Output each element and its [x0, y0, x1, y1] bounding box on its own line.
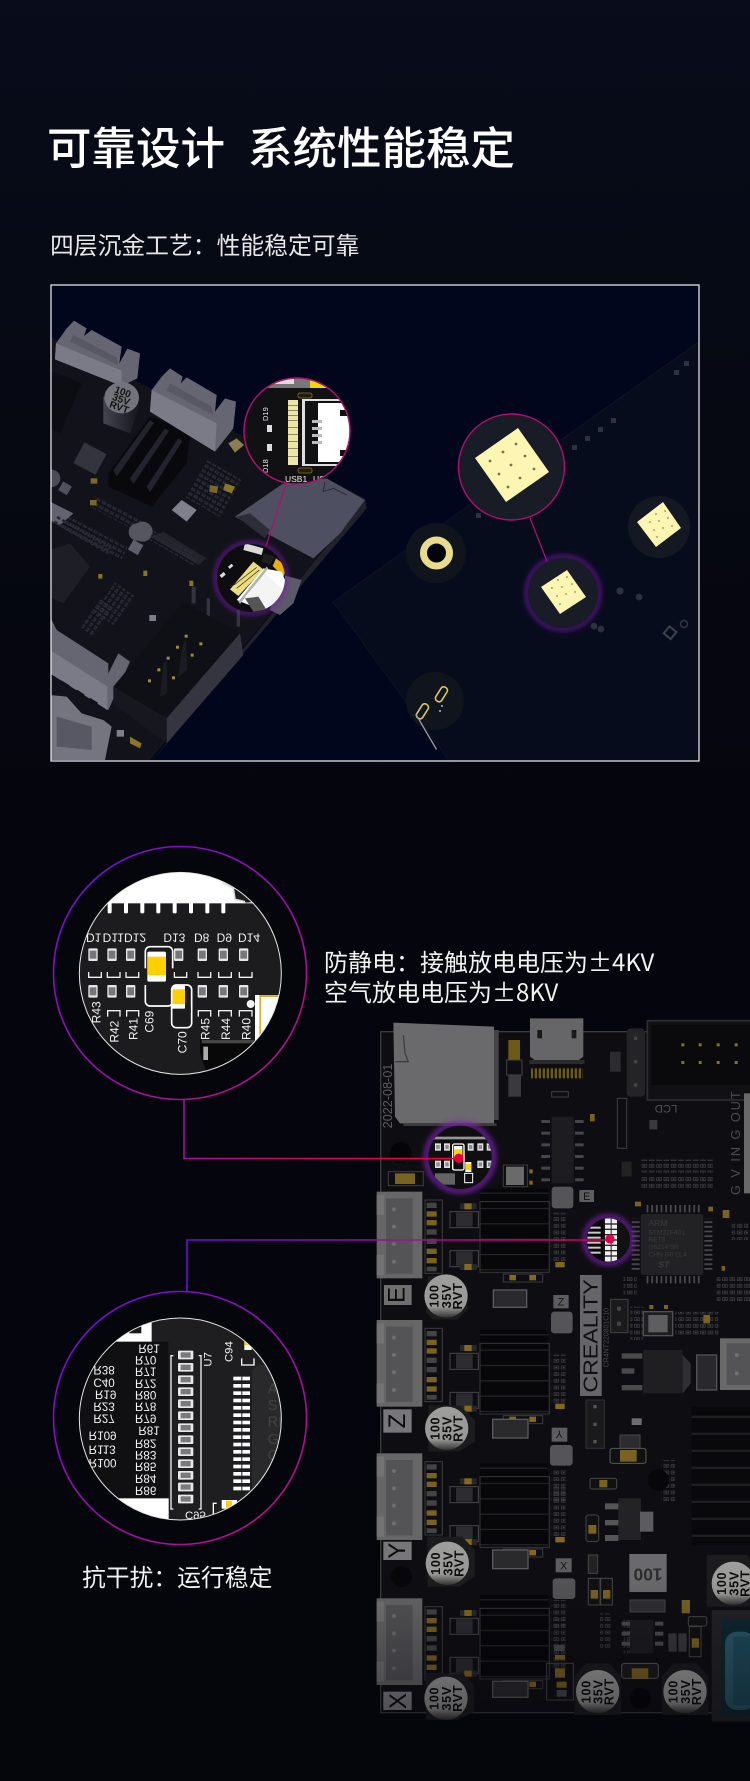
- micro USB: [529, 1018, 585, 1078]
- USB magnifier: large: D18: [261, 459, 270, 473]
- small axis tags: Z: [558, 1297, 565, 1309]
- designators top row: D12: [124, 930, 146, 944]
- capacitors: [424, 1274, 750, 1720]
- designators resistor column: R84: [135, 1471, 157, 1484]
- right side chip: A: [268, 1381, 278, 1397]
- capacitors: 35V: [440, 1284, 454, 1308]
- capacitors: 100: [428, 1284, 442, 1308]
- connector lower left: [50, 617, 130, 710]
- text: ESD spec: [324, 943, 654, 1008]
- MCU: [632, 1205, 712, 1283]
- power transistor: [622, 1350, 691, 1393]
- Y1 crystal: [643, 1305, 673, 1336]
- small axis tags: Y: [556, 1428, 563, 1440]
- axis labels: Z: [384, 1414, 411, 1428]
- axis labels: E: [384, 1287, 411, 1303]
- capacitor: 100: [113, 385, 133, 401]
- USB magnifier: small: [216, 543, 288, 613]
- P3 header: [617, 1028, 645, 1148]
- Y2 crystal: [503, 1165, 533, 1187]
- USB magnifier: large: USB: [313, 474, 331, 484]
- subtitle: 四层沉金工艺：性能稳定可靠: [50, 226, 359, 261]
- highlight spot: resistor array: [585, 1217, 632, 1263]
- designators resistor column: R78: [135, 1400, 156, 1413]
- designators top row: D13: [163, 930, 186, 944]
- LCD header: LCD: [655, 1102, 677, 1114]
- capacitors: 100: [667, 1680, 681, 1703]
- power labels: G V IN G OUT: [729, 1089, 743, 1195]
- CREALITY logo: [579, 1275, 611, 1396]
- small axis tags: X: [560, 1560, 567, 1572]
- MOSFET heatsink: [692, 1407, 750, 1545]
- designators left column: R100: [89, 1456, 117, 1469]
- title: 系统性能稳定: [248, 112, 515, 177]
- designators right: C94: [224, 1341, 236, 1362]
- right side chip: RE: [268, 1415, 288, 1431]
- resistor arrays: [552, 1159, 750, 1653]
- text: ESD spec: 防静电：接触放电电压为±4KV: [324, 943, 654, 978]
- left board with connectors and components: [43, 321, 367, 763]
- capacitors: RVT: [452, 1550, 466, 1577]
- USB magnifier: large: D: [262, 474, 268, 484]
- designators left column: R109: [89, 1429, 117, 1442]
- potentiometers: [550, 1187, 575, 1599]
- designators resistor column: R85: [135, 1460, 156, 1473]
- designators left column: [89, 1363, 117, 1469]
- designators lower: R44: [219, 1018, 233, 1040]
- MCU: G6214 9R: [648, 1244, 679, 1251]
- P2 jumper: [611, 1299, 628, 1333]
- designators resistor column: R81: [138, 1424, 160, 1437]
- connector line: ESD callout: [184, 1100, 458, 1158]
- MCU: CHN G0 LL4: [648, 1252, 687, 1259]
- designators lower: R41: [127, 1018, 141, 1040]
- designators lower: [90, 1001, 254, 1053]
- right connector: [720, 1338, 750, 1390]
- main board image: [370, 1018, 750, 1723]
- small axis tags: E: [583, 1191, 590, 1203]
- capacitors: 35V: [441, 1416, 455, 1441]
- bottom pad: [406, 672, 464, 750]
- designators lower: R42: [108, 1020, 122, 1043]
- designators left column: R38: [93, 1363, 115, 1376]
- callout: ESD magnifier: [54, 846, 306, 1100]
- MCU: STM32F401: [648, 1229, 685, 1236]
- designators resistor column: R82: [135, 1436, 156, 1449]
- callout: anti-interference magnifier: [54, 1292, 306, 1544]
- capacitors: 35V: [727, 1571, 741, 1596]
- lower-left board components: [50, 515, 302, 760]
- designators lower: R45: [198, 1018, 212, 1040]
- text: anti-interference: 抗干扰：运行稳定: [82, 1558, 272, 1593]
- panel: four-layer immersion gold board photo: [43, 285, 700, 763]
- capacitors: RVT: [690, 1678, 704, 1705]
- SD card slot: [235, 478, 365, 558]
- designators left column: R19: [95, 1388, 116, 1401]
- yellow capacitor C69: [142, 947, 174, 1006]
- right side chip: [252, 1365, 290, 1510]
- capacitor: [103, 382, 140, 433]
- top white connector: [77, 870, 283, 913]
- blue fuse: [712, 1610, 750, 1722]
- gold pad with purple glow: [527, 557, 599, 629]
- USB magnifier: large: USB1: [285, 474, 307, 484]
- designators resistor column: R61: [138, 1342, 160, 1355]
- text: ESD spec: 空气放电电压为±8KV: [324, 973, 558, 1008]
- Q2 area components: [391, 1418, 707, 1709]
- designators resistor column: R72: [135, 1376, 156, 1389]
- capacitors: RVT: [451, 1282, 465, 1310]
- axis labels: [383, 1285, 412, 1710]
- CREALITY logo: CR4NT220801C10: [604, 1308, 611, 1367]
- right side chip: C: [268, 1448, 279, 1464]
- MCU: ARM: [648, 1218, 668, 1228]
- capacitors: RVT: [451, 1685, 465, 1712]
- square and ring test points: [664, 626, 676, 639]
- USB magnifier: large: D19: [261, 407, 270, 421]
- red marker: ESD: [454, 1154, 463, 1163]
- dark left region: [77, 1317, 168, 1523]
- designators top row: D14: [238, 930, 260, 944]
- connector line: pad: [530, 518, 548, 562]
- diodes: [493, 1290, 528, 1697]
- designators resistor column: R83: [135, 1448, 156, 1461]
- ESD diodes rows: [88, 948, 252, 998]
- white corners: [113, 1320, 169, 1522]
- title: 可靠设计: [47, 112, 225, 177]
- right side chip: S: [268, 1398, 278, 1414]
- designators left column: R113: [89, 1443, 116, 1456]
- designators left column: R23: [93, 1400, 115, 1413]
- capacitors: RVT: [603, 1678, 617, 1705]
- driver heatsinks: [450, 1188, 566, 1689]
- capacitors: 35V: [440, 1686, 454, 1711]
- connector line: anti-interference callout: [187, 1240, 610, 1292]
- Q2 area components: 100: [634, 1565, 662, 1585]
- SD card slot: [393, 1023, 499, 1126]
- connector 2: [150, 368, 236, 452]
- white pin column: [233, 1377, 250, 1490]
- designators resistor column: R79: [135, 1412, 156, 1425]
- designators left column: C40: [93, 1376, 115, 1389]
- axis labels: X: [385, 1693, 412, 1709]
- connector bottom: [50, 695, 112, 760]
- designators resistor column: R71: [135, 1365, 156, 1378]
- designators top row: D11: [103, 930, 124, 944]
- designators resistor column: R86: [135, 1484, 156, 1497]
- capacitors: 100: [715, 1572, 729, 1595]
- pin header box: [113, 602, 243, 743]
- LCD header: [647, 1021, 750, 1114]
- pad halo: far right: [628, 496, 690, 558]
- MCU: RET6: [648, 1237, 666, 1244]
- chip bottom right: [200, 1040, 287, 1083]
- designators top row: D8: [194, 930, 210, 944]
- gold ring pad: [406, 523, 466, 583]
- gold pad magnified: [458, 414, 564, 520]
- axis labels: Y: [384, 1543, 411, 1559]
- designators top row: [86, 930, 260, 944]
- capacitor: RVT: [108, 399, 130, 417]
- designators lower: C70: [176, 1031, 190, 1053]
- highlight spot: ESD diodes: [427, 1124, 493, 1191]
- connector line: USB: [266, 484, 286, 546]
- date code: 2022-08-01: [381, 1064, 395, 1128]
- red marker: anti-interference: [605, 1234, 615, 1244]
- designators resistor column: R70: [135, 1353, 157, 1366]
- side connectors: [377, 1192, 442, 1685]
- capacitors: 100: [428, 1687, 442, 1710]
- designators lower: C69: [142, 1010, 156, 1033]
- white block right: [247, 995, 285, 1042]
- designators left column: R27: [93, 1412, 115, 1425]
- designators top row: D1: [86, 930, 102, 944]
- capacitors: RVT: [452, 1415, 466, 1442]
- capacitors: 35V: [592, 1679, 606, 1704]
- designators resistor column: [135, 1342, 160, 1497]
- USB magnifier: large: [244, 378, 355, 484]
- designators lower: R40: [240, 1018, 254, 1040]
- U8 chip: [541, 1117, 584, 1183]
- small axis tags: [552, 1190, 594, 1572]
- designators top row: D9: [217, 930, 232, 944]
- right side chip: GO: [268, 1432, 290, 1448]
- designators right: C95: [185, 1508, 206, 1520]
- designators right: U7: [203, 1352, 215, 1367]
- yellow capacitor C70: [172, 985, 192, 1028]
- designators lower: R43: [90, 1001, 104, 1023]
- MCU: ST: [658, 1259, 670, 1269]
- capacitors: 100: [579, 1680, 593, 1703]
- capacitors: 100: [429, 1552, 443, 1575]
- connector 1: [55, 321, 140, 386]
- right bare board: [333, 341, 700, 762]
- designators resistor column: R80: [135, 1388, 157, 1401]
- capacitors: 35V: [441, 1551, 455, 1576]
- resistor column: [171, 1351, 201, 1512]
- J2 header: [586, 1400, 604, 1448]
- via dots: [476, 361, 689, 632]
- capacitors: 35V: [679, 1679, 693, 1704]
- designators right: [185, 1341, 236, 1520]
- bottom fade: [370, 1577, 750, 1723]
- capacitors: 100: [428, 1417, 442, 1440]
- CREALITY logo: CREALITY: [579, 1279, 602, 1393]
- capacitor: 35V: [111, 392, 131, 409]
